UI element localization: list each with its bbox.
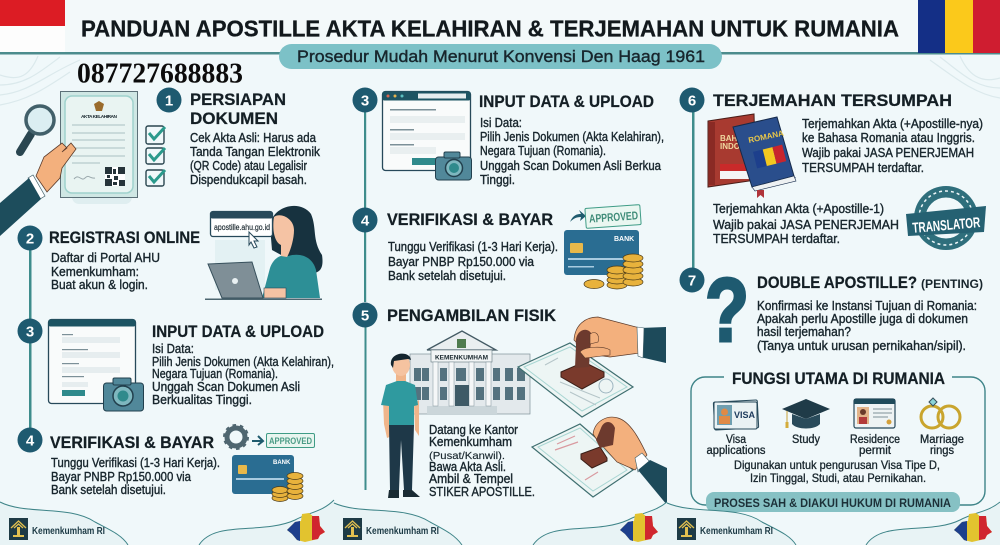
body: Tunggu Verifikasi (1-3 Hari Kerja). <box>51 456 220 470</box>
body: Apakah perlu Apostille juga di dokumen <box>757 312 968 326</box>
body: Pilih Jenis Dokumen (Akta Kelahiran), <box>480 130 664 144</box>
heading: TERJEMAHAN TERSUMPAH <box>713 91 952 110</box>
panel: column 1 <box>0 88 334 502</box>
body: Bayar PNBP Rp150.000 via <box>51 470 191 484</box>
icon: dictionaries: BAH <box>720 134 738 143</box>
coins <box>272 472 303 502</box>
certificate <box>60 92 138 198</box>
romania map <box>620 513 658 542</box>
body: Negara Tujuan (Romania). <box>480 144 606 158</box>
step 3 <box>18 318 334 411</box>
body 2: TERSUMPAH terdaftar. <box>713 232 840 246</box>
icon: residence permit <box>854 399 895 428</box>
step 7 <box>680 260 983 361</box>
flag: Romania <box>918 0 1000 53</box>
magnifier <box>20 106 54 152</box>
icon: dictionaries <box>708 114 796 198</box>
approved badge: APPROVED <box>269 436 312 446</box>
step 4: 4 <box>26 432 35 450</box>
subtitle pill <box>279 44 722 69</box>
document stamp 1 <box>518 317 666 417</box>
body: Wajib pakai JASA PENERJEMAH <box>802 146 974 160</box>
body: Ambil & Tempel <box>429 472 513 486</box>
body: (Pusat/Kanwil). <box>429 450 505 462</box>
phone number: 087727688883 <box>77 58 243 90</box>
coins <box>584 254 643 289</box>
body: Isi Data: <box>152 342 194 356</box>
bank card: BANK <box>614 236 634 243</box>
icon: gear <box>224 426 248 448</box>
body 2: Terjemahkan Akta (+Apostille-1) <box>713 202 884 216</box>
building: Kemenkumham: KEMENKUMHAM <box>435 354 488 362</box>
heading: DOUBLE APOSTILLE? <box>757 273 917 292</box>
step 5 <box>352 302 667 505</box>
body: STIKER APOSTILLE. <box>429 485 535 499</box>
step 3 <box>352 88 664 187</box>
sleeve <box>0 178 41 236</box>
icon: certificate document held in hand <box>0 92 138 236</box>
header band <box>0 0 1000 54</box>
heading: VERIFIKASI & BAYAR <box>50 433 214 452</box>
body: Kemenkumham: <box>51 265 139 279</box>
heading: INPUT DATA & UPLOAD <box>479 92 654 111</box>
bottom pill: PROSES SAH & DIAKUI HUKUM DI RUMANIA <box>714 496 951 510</box>
heading: INPUT DATA & UPLOAD <box>152 322 324 341</box>
body: Cek Akta Asli: Harus ada <box>190 131 316 145</box>
translator stamp <box>906 186 986 250</box>
step 4 <box>352 205 643 289</box>
laptop <box>208 262 263 298</box>
panel: column 3 <box>680 88 986 512</box>
romania map <box>954 513 992 542</box>
timeline line <box>692 110 694 270</box>
icon: question mark: ? <box>705 260 749 361</box>
body: hasil terjemahan? <box>757 325 851 339</box>
step 4 <box>18 426 314 502</box>
camera <box>436 152 472 180</box>
body: ke Bahasa Romania atau Inggris. <box>802 131 975 145</box>
form window <box>382 92 470 170</box>
building: Kemenkumham <box>410 331 530 414</box>
step 2: 2 <box>26 230 34 248</box>
bank card <box>232 455 294 494</box>
certificate: AKTA KELAHIRAN <box>81 114 118 120</box>
cuff <box>28 175 45 199</box>
body: Unggah Scan Dokumen Asli <box>152 380 300 394</box>
body: Buat akun & login. <box>51 278 148 292</box>
step 6: 6 <box>688 92 696 110</box>
decorative waves <box>0 56 1000 105</box>
face <box>273 215 294 257</box>
body: (Tanya untuk urusan pernikahan/sipil). <box>757 339 966 353</box>
bank card: BANK <box>273 460 291 466</box>
footer label: Kemenkumham RI <box>366 526 439 537</box>
heading: PERSIAPAN <box>190 90 286 109</box>
icon: visa: VISA <box>734 410 756 420</box>
step 5: 5 <box>361 308 369 324</box>
approved badge <box>266 434 314 448</box>
logo <box>343 518 362 540</box>
hair <box>270 206 323 273</box>
heading: REGISTRASI ONLINE <box>49 228 200 247</box>
body: Berkualitas Tinggi. <box>152 393 252 407</box>
arrow <box>570 210 586 222</box>
arrow <box>252 436 263 445</box>
camera <box>104 378 144 411</box>
form window <box>48 320 136 404</box>
icon: marriage rings <box>921 398 960 428</box>
label: study: Study <box>792 434 820 446</box>
description: Digunakan untuk pengurusan Visa Tipe D, <box>734 458 940 472</box>
browser bar: apostille.ahu.go.id <box>214 223 270 232</box>
label: residence permit: Residence <box>850 434 900 446</box>
footer: column 1 <box>9 513 325 542</box>
body: Bayar PNBP Rp150.000 via <box>388 255 534 269</box>
panel: column 2 <box>352 88 667 505</box>
step 6 <box>680 88 986 250</box>
logo <box>9 518 28 540</box>
bank card <box>564 230 639 275</box>
body: Tunggu Verifikasi (1-3 Hari Kerja). <box>388 240 558 254</box>
subtitle pill: Prosedur Mudah Menurut Konvensi Den Haag 1961 <box>297 47 705 66</box>
icon: dictionaries: INDO <box>720 142 740 151</box>
footer label: Kemenkumham RI <box>700 526 773 537</box>
body: Bank setelah disetujui. <box>388 269 506 283</box>
label: visa applications: Visa <box>726 434 747 446</box>
panel: fungsi utama <box>691 368 985 512</box>
body: Bank setelah disetujui. <box>51 483 166 497</box>
person <box>381 354 420 498</box>
icon: checklist <box>146 126 165 186</box>
body: Daftar di Portal AHU <box>51 251 160 265</box>
heading: DOKUMEN <box>190 109 278 128</box>
heading: PENGAMBILAN FISIK <box>387 306 557 325</box>
body: Bawa Akta Asli. <box>429 460 506 474</box>
footer label: Kemenkumham RI <box>32 526 105 537</box>
body: Konfirmasi ke Instansi Tujuan di Romania: <box>757 299 977 313</box>
body: Unggah Scan Dokumen Asli Berkua <box>480 159 661 173</box>
romania map <box>287 513 325 542</box>
step 3: 3 <box>26 324 34 340</box>
footer: column 2 <box>343 513 658 542</box>
step 1 <box>156 88 321 187</box>
step 4: 4 <box>361 212 370 230</box>
body: TERSUMPAH terdaftar. <box>802 161 924 175</box>
document stamp 2 <box>532 417 667 505</box>
step 2 <box>18 226 200 292</box>
torso <box>262 255 320 298</box>
step 3: 3 <box>361 92 369 110</box>
approved badge: APPROVED <box>589 210 638 226</box>
step 7: 7 <box>688 272 696 290</box>
heading: VERIFIKASI & BAYAR <box>387 210 553 229</box>
illustration: woman on laptop <box>205 206 323 300</box>
body: Pilih Jenis Dokumen (Akta Kelahiran), <box>152 355 334 369</box>
description: Izin Tinggal, Studi, atau Pernikahan. <box>750 471 926 485</box>
body: Dispendukcapil basah. <box>190 173 307 187</box>
body: Tinggi. <box>480 173 515 187</box>
timeline line <box>29 240 32 440</box>
body: Kemenkumham <box>429 435 512 449</box>
approved badge <box>585 205 641 228</box>
body 2: Wajib pakai JASA PENERJEMAH <box>713 218 899 232</box>
icon: visa <box>713 400 759 430</box>
label: visa applications: applications <box>706 445 766 457</box>
label: residence permit: permit <box>859 445 892 457</box>
hand <box>36 143 76 192</box>
label: marriage rings: rings <box>930 445 954 457</box>
body: Isi Data: <box>480 116 522 130</box>
step 1: 1 <box>165 92 173 110</box>
icon: graduation cap <box>782 399 830 428</box>
icon: dictionaries: ROMANA <box>748 129 785 145</box>
logo <box>677 518 696 540</box>
timeline line <box>364 112 366 302</box>
heading: FUNGSI UTAMA DI RUMANIA <box>732 369 945 388</box>
bottom pill <box>706 492 960 512</box>
body: Datang ke Kantor <box>429 423 518 437</box>
footer waves <box>0 500 1000 545</box>
body: Tanda Tangan Elektronik <box>190 145 321 159</box>
body: Negara Tujuan (Romania). <box>152 367 278 381</box>
title: PANDUAN APOSTILLE AKTA KELAHIRAN & TERJEMAHAN UNTUK RUMANIA <box>81 16 899 42</box>
flag: Indonesia <box>0 0 65 52</box>
footer: column 3 <box>677 513 992 542</box>
label: marriage rings: Marriage <box>920 434 964 446</box>
body: Terjemahkan Akta (+Apostille-nya) <box>802 117 983 131</box>
step 7: (PENTING) <box>921 277 983 291</box>
body: (QR Code) atau Legalisir <box>190 159 307 173</box>
